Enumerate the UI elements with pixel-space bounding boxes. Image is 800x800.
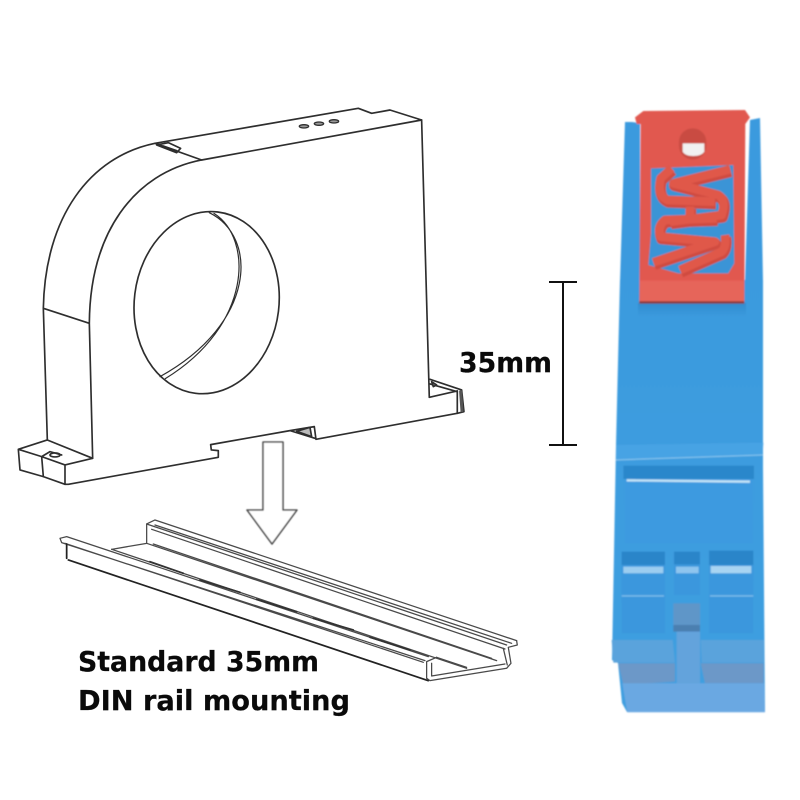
label: 35mm dimension: 35mm <box>459 346 552 379</box>
red clip <box>635 110 750 304</box>
recess highlight <box>627 480 750 482</box>
front lips <box>612 640 764 663</box>
device line drawing <box>18 108 464 484</box>
DIN rail drawing <box>60 520 517 681</box>
rail front flange <box>60 537 467 668</box>
rail back flange <box>147 520 517 649</box>
center column <box>677 632 700 683</box>
dimension bracket <box>549 282 577 445</box>
underside shadows <box>618 663 764 685</box>
clip plate <box>635 110 750 303</box>
ridge seam <box>616 455 763 460</box>
blue body <box>612 280 765 712</box>
middle window <box>674 552 700 595</box>
top clip detail <box>157 143 181 153</box>
rail front wall <box>67 544 428 681</box>
clip window <box>648 165 734 273</box>
hole inner rim <box>160 213 241 379</box>
label: rail mounting line 1: Standard 35mm <box>78 645 319 678</box>
spring shadow <box>654 171 731 272</box>
shadow below clip <box>638 303 746 317</box>
status indicator dots <box>299 120 339 128</box>
blue rear rails <box>620 118 763 282</box>
device front face outline <box>65 120 457 484</box>
clip bottom shadow <box>639 301 744 304</box>
photo: blue device <box>612 110 765 712</box>
bottom lip <box>622 683 765 712</box>
right window <box>709 551 753 633</box>
device through hole <box>124 203 290 402</box>
arrow: down to rail <box>247 442 297 544</box>
recess main face <box>625 479 753 543</box>
device rounded housing <box>43 143 202 458</box>
clip slot hole <box>679 128 706 159</box>
rail web <box>147 543 497 661</box>
left mounting foot <box>18 440 93 484</box>
rail mounting slots <box>150 562 410 650</box>
device top edge <box>155 108 422 160</box>
clip bottom band <box>640 281 744 301</box>
left window <box>622 552 665 633</box>
rail back riser <box>112 524 147 549</box>
spring <box>653 168 730 270</box>
label: rail mounting line 2: DIN rail mounting <box>78 684 350 717</box>
lower blue section <box>612 443 765 712</box>
right mounting foot <box>297 379 464 437</box>
rail end profile <box>427 641 517 681</box>
recess top shadow <box>623 466 754 479</box>
step ridge <box>616 443 763 460</box>
center slot <box>673 603 700 632</box>
